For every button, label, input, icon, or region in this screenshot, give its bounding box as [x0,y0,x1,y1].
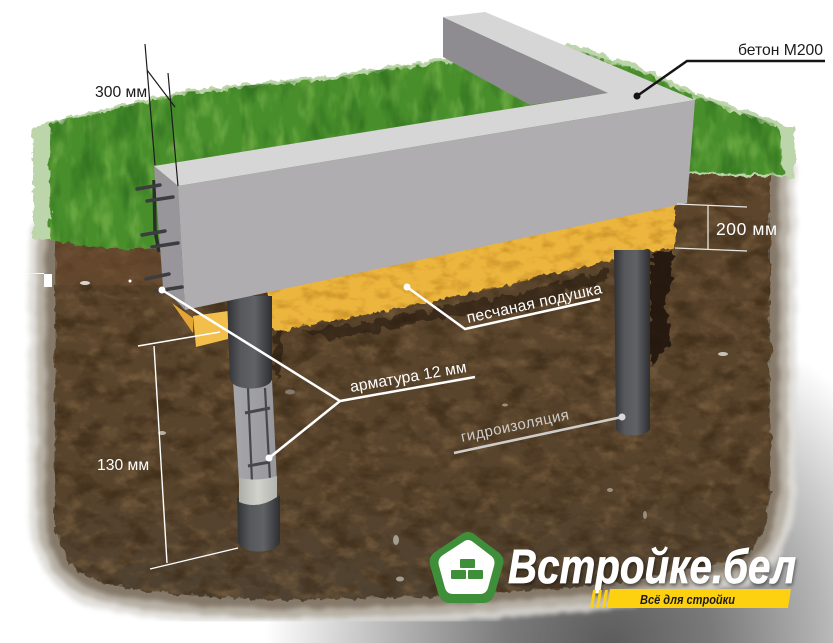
dimension: 130 mm [97,332,238,569]
beam front face [178,100,695,310]
left pile lower pipe [237,495,280,552]
dimension: 300 mm [95,44,178,186]
callout: concrete: бетон М200 [738,42,823,59]
tagline bar: Всё для стройки [640,593,735,607]
callout: concrete [634,42,825,100]
logo [430,532,796,608]
pile: right [614,250,650,436]
rod behind end face [154,180,159,252]
left pile concrete filler [239,476,277,505]
rebar ends [137,185,182,291]
beam inner side face [443,17,608,105]
beam left end face [154,166,185,310]
callout: sand cushion [404,280,604,329]
callout: waterproofing [454,406,626,453]
callout: waterproofing: гидроизоляция [459,406,570,446]
callout: sand cushion: песчаная подушка [465,280,604,327]
left pile concrete core [233,380,277,482]
concrete beam [137,12,695,310]
callout: reinforcement: арматура 12 мм [349,359,468,396]
grass texture [50,48,783,250]
dimension: 300 mm: 300 мм [95,84,147,101]
dimension: 130 mm: 130 мм [97,457,149,474]
left pile rebar cage [245,388,270,482]
tagline bar [590,589,791,608]
stones [80,280,728,582]
pile: left with exposed reinforcement [227,296,280,552]
logo badge [430,532,503,603]
grass [50,50,785,250]
shadow under logo [200,280,833,643]
soil ground [55,170,770,600]
left pile upper pipe [227,296,272,388]
callout: reinforcement [158,286,475,462]
white gap in soil edge [26,273,52,287]
grass edge fade [33,44,795,250]
soil texture [55,174,770,600]
beam top face [154,12,695,186]
dimension: 200 mm [675,204,777,251]
sand cushion [172,195,680,347]
dark soil under sand [272,252,674,385]
dimension: 200 mm: 200 мм [716,219,777,239]
